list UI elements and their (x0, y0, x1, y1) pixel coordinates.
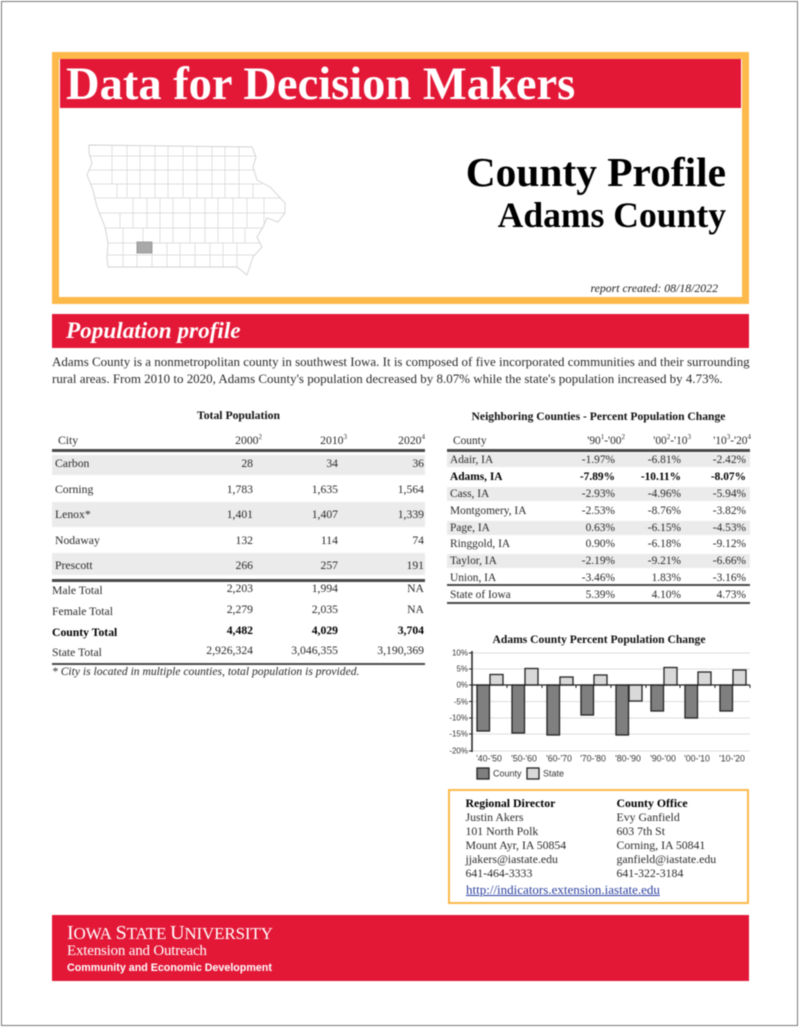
table: total population: 34 (326, 457, 338, 470)
y axis labels: 5% (456, 664, 468, 674)
y axis labels: 0% (456, 680, 468, 690)
table: total population: 2,926,324 (206, 644, 253, 657)
county name: Adams County (498, 195, 726, 235)
county office: ganfield@iastate.edu (616, 852, 716, 866)
regional director: Mount Ayr, IA 50854 (466, 838, 566, 852)
table: total population: 3,046,355 (291, 644, 338, 657)
table: neighboring counties: State of Iowa (450, 589, 511, 601)
table: total population: 3,190,369 (377, 644, 424, 657)
website link: http://indicators.extension.iastate.edu (466, 882, 660, 897)
county office (616, 796, 716, 880)
county office: Evy Ganfield (616, 810, 680, 824)
table: total population: 266 (235, 559, 253, 572)
table: total population: NA (407, 582, 424, 595)
x axis labels: '80-'90 (615, 754, 641, 764)
table: neighboring counties: -3.16% (713, 572, 746, 584)
table: neighboring counties: Adair, IA (450, 454, 493, 466)
table title: Total Population (197, 409, 280, 422)
table: total population: 4,029 (312, 624, 338, 637)
table: total population: 1,564 (398, 483, 424, 496)
section heading (52, 314, 749, 348)
table: total population: Male Total (52, 584, 103, 597)
table: neighboring counties: '002-'103 (653, 433, 691, 447)
county office: Corning, IA 50841 (616, 838, 705, 852)
table: total population: City (58, 434, 78, 447)
county office: County Office (616, 796, 688, 810)
table: neighboring counties: -2.19% (582, 555, 615, 567)
table: total population: 74 (412, 534, 424, 547)
county bars (477, 685, 732, 735)
table: total population: Lenox* (55, 508, 91, 521)
legend: County (493, 768, 522, 778)
report heading: County Profile (466, 149, 726, 195)
table: neighboring counties: Cass, IA (450, 488, 489, 500)
table: total population: 1,635 (312, 483, 338, 496)
table: neighboring counties: -7.89% (580, 471, 615, 483)
y axis labels: -15% (449, 730, 468, 738)
table: neighboring counties: -4.96% (648, 488, 681, 500)
regional director: jjakers@iastate.edu (466, 852, 558, 866)
table: total population: State Total (52, 646, 102, 659)
x axis labels: '00-'10 (684, 754, 710, 764)
table: neighboring counties: Union, IA (450, 572, 496, 584)
table: neighboring counties: -6.15% (648, 522, 681, 534)
table: neighboring counties: -2.53% (582, 505, 615, 517)
table: neighboring counties (446, 410, 752, 605)
regional director: Regional Director (466, 796, 555, 810)
department line: Community and Economic Development (67, 962, 272, 974)
section heading: Population profile (66, 318, 241, 344)
table: total population: 20002 (235, 433, 262, 447)
table: total population: 132 (235, 534, 253, 547)
extension line: Extension and Outreach (67, 943, 207, 959)
y axis labels: -10% (449, 714, 468, 722)
table: total population: 1,783 (227, 483, 253, 496)
footer banner (52, 915, 749, 981)
legend (477, 768, 564, 779)
table: neighboring counties: '103-'204 (713, 433, 751, 447)
table: neighboring counties: -6.81% (648, 454, 681, 466)
table: total population: NA (407, 603, 424, 616)
table: total population: 191 (406, 559, 424, 572)
county office: 603 7th St (616, 824, 665, 838)
table: neighboring counties: -9.12% (713, 538, 746, 550)
table title: Neighboring Counties - Percent Population Change (472, 410, 725, 423)
contact box (448, 789, 749, 904)
intro paragraph: rural areas. From 2010 to 2020, Adams County's population decreased by 8.07% while the state's population increased by 4.73%. (52, 371, 723, 386)
regional director (464, 796, 567, 880)
table: neighboring counties: -8.07% (711, 471, 746, 483)
table: total population: 1,994 (312, 582, 338, 595)
table: neighboring counties: -3.46% (582, 572, 615, 584)
highlighted county (137, 242, 152, 253)
table: neighboring counties: -2.42% (713, 454, 746, 466)
table: total population: 4,482 (227, 624, 253, 637)
table: total population: 2,035 (312, 603, 338, 616)
table: neighboring counties: Adams, IA (450, 471, 503, 483)
table: neighboring counties: -3.82% (713, 505, 746, 517)
intro paragraph: Adams County is a nonmetropolitan county in southwest Iowa. It is composed of five incorporated communities and their surrounding (52, 354, 750, 369)
y axis labels (449, 648, 468, 756)
table: total population: 20204 (398, 433, 425, 447)
y axis labels: -5% (454, 698, 468, 706)
table: neighboring counties: -8.76% (648, 505, 681, 517)
x axis labels: '40-'50 (476, 754, 502, 764)
y axis labels: 10% (452, 648, 468, 658)
table: total population: Carbon (55, 457, 89, 470)
table: neighboring counties: 4.73% (717, 589, 746, 601)
table: total population: Nodaway (55, 534, 100, 547)
table: total population: 28 (241, 457, 253, 470)
table: total population: 20103 (320, 433, 347, 447)
table: neighboring counties: -1.97% (582, 454, 615, 466)
table: total population (51, 409, 426, 678)
county office: 641-322-3184 (616, 866, 683, 880)
table: total population: Corning (55, 483, 93, 496)
university name: IOWA STATE UNIVERSITY (67, 922, 273, 944)
table: total population: 1,407 (312, 508, 338, 521)
table: total population: 2,279 (227, 603, 253, 616)
table: neighboring counties: Page, IA (450, 522, 490, 534)
table: neighboring counties: -2.93% (582, 488, 615, 500)
y axis labels: -20% (449, 746, 468, 756)
regional director: 641-464-3333 (466, 866, 532, 880)
table: neighboring counties: 0.90% (586, 538, 615, 550)
table: total population: 1,401 (227, 508, 253, 521)
regional director: Justin Akers (466, 810, 524, 824)
intro paragraph (52, 354, 750, 386)
header panel (52, 52, 749, 304)
x axis labels: '60-'70 (546, 754, 572, 764)
table: neighboring counties: -6.66% (713, 555, 746, 567)
table: total population: Female Total (52, 605, 113, 618)
table: total population: 2,203 (227, 582, 253, 595)
table: total population: 3,704 (398, 624, 424, 637)
table: total population: 114 (321, 534, 338, 547)
table: neighboring counties: -4.53% (713, 522, 746, 534)
chart: percent population change (449, 633, 752, 780)
table: neighboring counties: County (453, 435, 487, 447)
state bars (490, 668, 746, 701)
x axis labels: '90-'00 (650, 754, 676, 764)
table: neighboring counties: 5.39% (586, 589, 615, 601)
x axis labels: '70-'80 (580, 754, 606, 764)
table: total population: Prescott (55, 559, 93, 572)
table: neighboring counties: 4.10% (652, 589, 681, 601)
table: neighboring counties: -6.18% (648, 538, 681, 550)
chart title: Adams County Percent Population Change (492, 633, 706, 646)
table: neighboring counties: 0.63% (586, 522, 615, 534)
report date: report created: 08/18/2022 (590, 281, 718, 295)
title banner: Data for Decision Makers (66, 59, 575, 110)
table: total population: 36 (412, 457, 424, 470)
table: neighboring counties: 1.83% (652, 572, 681, 584)
table: neighboring counties: Ringgold, IA (450, 538, 510, 550)
x axis labels (476, 754, 745, 764)
table: neighboring counties: Taylor, IA (450, 555, 497, 567)
table: neighboring counties: Montgomery, IA (450, 505, 526, 517)
x axis labels: '50-'60 (511, 754, 537, 764)
table: neighboring counties: -5.94% (713, 488, 746, 500)
footnote: * City is located in multiple counties, total population is provided. (52, 665, 359, 678)
table: total population: County Total (52, 626, 117, 639)
regional director: 101 North Polk (466, 824, 538, 838)
table: total population: 1,339 (398, 508, 424, 521)
legend: State (543, 768, 564, 778)
table: neighboring counties: -9.21% (648, 555, 681, 567)
table: neighboring counties: -10.11% (641, 471, 681, 483)
table: total population: 257 (320, 559, 338, 572)
table: neighboring counties: '901-'002 (587, 433, 625, 447)
map of Iowa counties (86, 144, 286, 276)
x axis labels: '10-'20 (719, 754, 745, 764)
